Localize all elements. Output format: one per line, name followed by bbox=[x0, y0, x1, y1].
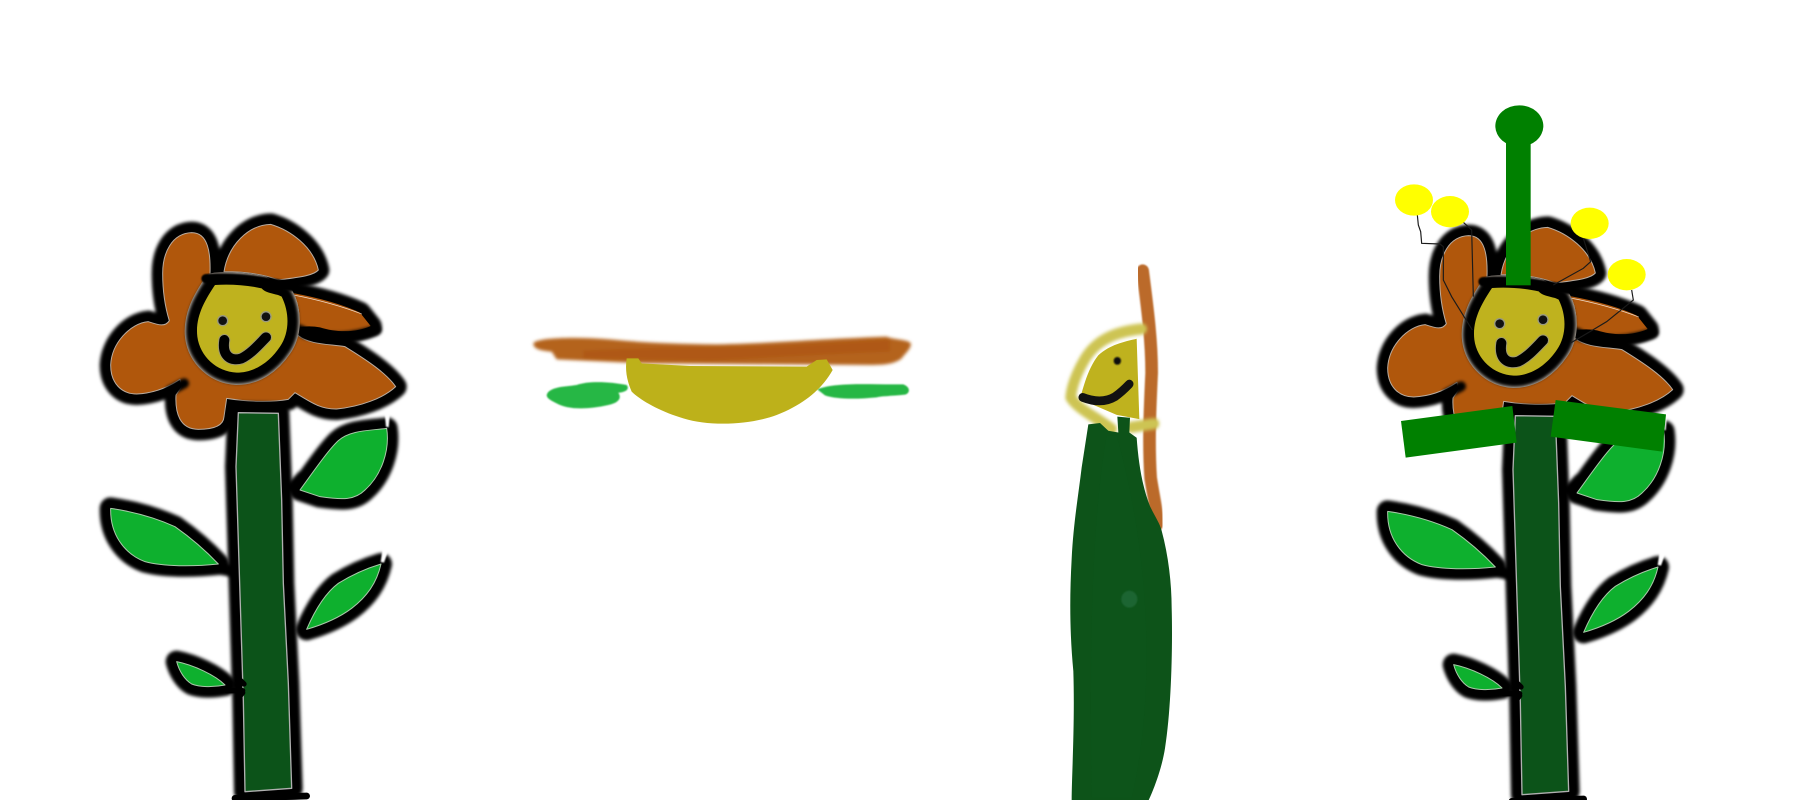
flower: front view bbox=[111, 224, 396, 798]
pistil bbox=[1495, 105, 1543, 285]
anthers bbox=[1395, 184, 1646, 290]
filaments bbox=[1417, 215, 1633, 343]
eye bbox=[1114, 357, 1121, 365]
flower: side view bbox=[1070, 271, 1172, 800]
brown petal line bbox=[1143, 271, 1158, 524]
body inner band bbox=[1091, 436, 1146, 797]
sepals bbox=[547, 382, 909, 408]
face bbox=[1080, 339, 1139, 419]
eyes bbox=[218, 312, 271, 326]
receptacle bbox=[626, 358, 833, 424]
reproductive parts overlay bbox=[1395, 105, 1666, 458]
flower base bbox=[1388, 227, 1673, 800]
face outline bbox=[1071, 329, 1154, 429]
petals bbox=[111, 224, 396, 429]
centre mark bbox=[1121, 591, 1137, 608]
body bbox=[1070, 417, 1172, 800]
sepal bars bbox=[1401, 400, 1666, 458]
leaves bbox=[111, 413, 390, 687]
stem bbox=[227, 413, 307, 798]
smile bbox=[224, 337, 266, 359]
face bbox=[197, 278, 293, 373]
flower: top view bbox=[533, 337, 911, 424]
flower: labelled diagram bbox=[1388, 105, 1673, 800]
petals bar bbox=[533, 337, 911, 365]
smile bbox=[1083, 384, 1129, 401]
